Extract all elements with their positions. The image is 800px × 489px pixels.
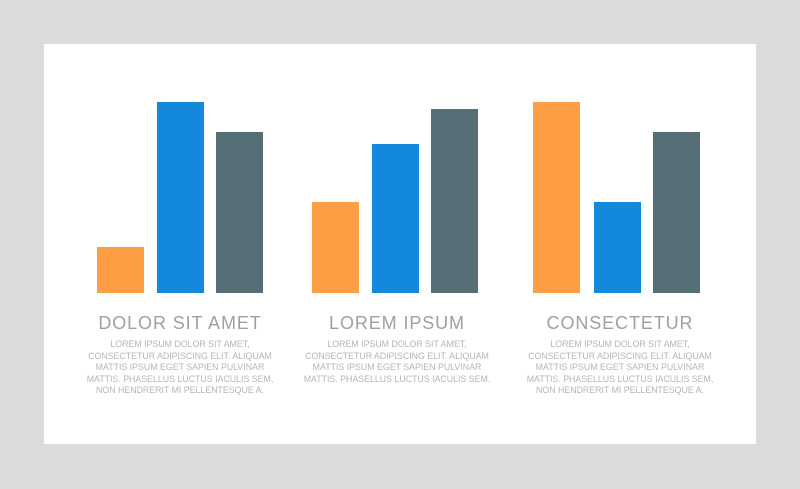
body 3: MATTIS. PHASELLUS LUCTUS IACULIS SEM, <box>527 374 713 384</box>
heading 2: LOREM IPSUM <box>329 313 465 333</box>
body 1: CONSECTETUR ADIPISCING ELIT. ALIQUAM <box>88 351 272 361</box>
bar: gray 3 <box>653 132 700 293</box>
body 3: LOREM IPSUM DOLOR SIT AMET, <box>550 339 690 349</box>
body 2: MATTIS. PHASELLUS LUCTUS IACULIS SEM. <box>304 374 490 384</box>
body 2: MATTIS IPSUM EGET SAPIEN PULVINAR <box>313 362 481 372</box>
bar: gray 2 <box>431 109 478 293</box>
bar: orange 1 <box>97 247 144 293</box>
body 3: MATTIS IPSUM EGET SAPIEN PULVINAR <box>536 362 704 372</box>
body 3: NON HENDRERIT MI PELLENTESQUE A. <box>536 385 704 395</box>
body 2 <box>304 339 490 384</box>
chart: group 1 bars <box>97 102 263 293</box>
bar: blue 3 <box>594 202 641 293</box>
panel: chart card <box>44 44 756 444</box>
text block: group 2 <box>304 313 490 384</box>
bar: blue 1 <box>157 102 204 293</box>
body 3 <box>527 339 713 395</box>
body 2: CONSECTETUR ADIPISCING ELIT. ALIQUAM <box>305 351 489 361</box>
body 1: NON HENDRERIT MI PELLENTESQUE A. <box>96 385 264 395</box>
body 1: MATTIS. PHASELLUS LUCTUS IACULIS SEM, <box>87 374 273 384</box>
heading 3: CONSECTETUR <box>547 313 693 333</box>
body 3: CONSECTETUR ADIPISCING ELIT. ALIQUAM <box>528 351 712 361</box>
chart: group 3 bars <box>533 102 700 293</box>
heading 1: DOLOR SIT AMET <box>98 313 262 333</box>
bar: gray 1 <box>216 132 263 293</box>
body 2: LOREM IPSUM DOLOR SIT AMET, <box>327 339 467 349</box>
text block: group 3 <box>527 313 713 395</box>
chart: group 2 bars <box>312 109 478 293</box>
text block: group 1 <box>87 313 273 395</box>
bar: orange 2 <box>312 202 359 293</box>
body 1 <box>87 339 273 395</box>
bar: blue 2 <box>372 144 419 293</box>
body 1: LOREM IPSUM DOLOR SIT AMET, <box>110 339 250 349</box>
bar: orange 3 <box>533 102 580 293</box>
body 1: MATTIS IPSUM EGET SAPIEN PULVINAR <box>96 362 264 372</box>
